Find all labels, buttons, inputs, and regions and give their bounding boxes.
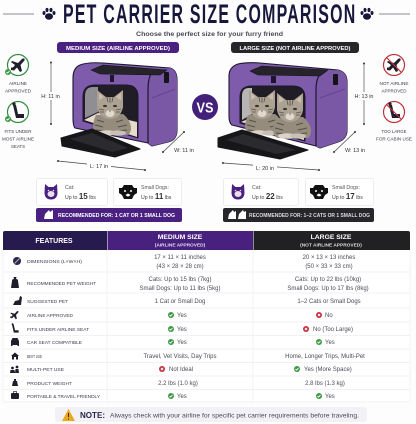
row: dimensions: (50 × 33 × 33 cm)	[305, 264, 353, 270]
row: suggested pet: 1–2 Cats or Small Dogs	[297, 299, 361, 305]
icon: too large for cabin: TOO LARGE	[382, 129, 406, 135]
recommendation bar large	[223, 208, 374, 222]
width dimension large: W: 13 in	[345, 148, 365, 154]
row: suggested pet: 1 Cat or Small Dog	[155, 299, 205, 305]
row: dimensions: 17 × 11 × 11 inches	[154, 255, 206, 261]
row: dimensions: DIMENSIONS (L×W×H)	[27, 259, 82, 265]
icon: too large for cabin: FOR CABIN USE	[376, 136, 412, 142]
card: large cat weight	[224, 178, 298, 206]
width dimension medium	[162, 131, 194, 154]
table header: large size: (NOT AIRLINE APPROVED)	[300, 242, 362, 248]
row: recommended pet weight: Small Dogs: Up to 11 lbs (5kg)	[140, 286, 220, 292]
height dimension medium: H: 11 in	[41, 94, 60, 100]
row: fits under airline seat: Yes	[177, 327, 187, 333]
card: large dog weight	[306, 178, 374, 206]
length dimension large: L: 20 in	[256, 166, 274, 172]
icon: fits under seat: FITS UNDER	[4, 129, 32, 135]
table header: large size: LARGE SIZE	[311, 234, 352, 241]
table header: features: FEATURES	[35, 238, 73, 245]
row: best use: Home, Longer Trips, Multi-Pet	[285, 354, 365, 360]
row: multi-pet use	[10, 366, 352, 373]
length dimension large	[222, 162, 320, 172]
row: fits under airline seat: No (Too Large)	[313, 327, 353, 333]
row: car seat compatible: Yes	[325, 340, 335, 346]
recommendation bar medium	[36, 208, 182, 222]
comparison table	[3, 231, 410, 402]
row: car seat compatible: CAR SEAT COMPATIBLE	[27, 340, 82, 346]
note callout: NOTE:	[80, 411, 105, 420]
row: multi-pet use: Yes (More Space)	[304, 367, 352, 373]
width dimension medium: W: 11 in	[174, 148, 194, 154]
VS badge	[192, 94, 218, 120]
row: airline approved	[10, 311, 333, 319]
card: medium dog weight: Up to 11 lbs	[141, 192, 172, 201]
large carrier with two cats	[218, 63, 347, 159]
row: suggested pet: SUGGESTED PET	[27, 299, 68, 305]
card: medium dog weight: Small Dogs:	[141, 185, 169, 191]
card: large dog weight: Small Dogs:	[332, 185, 360, 191]
row: best use	[11, 352, 365, 360]
note callout: Always check with your airline for specific pet carrier requirements before traveling.	[110, 414, 359, 420]
row: recommended pet weight: Small Dogs: Up to 17 lbs (8kg)	[287, 286, 369, 292]
row: suggested pet	[13, 296, 361, 305]
table header: large size	[254, 231, 410, 250]
row: car seat compatible: Yes	[177, 340, 187, 346]
row: dimensions	[13, 255, 355, 270]
large size pill: LARGE SIZE (NOT AIRLINE APPROVED)	[240, 46, 351, 52]
row: recommended pet weight: Cats: Up to 15 lbs (7kg)	[148, 277, 212, 283]
VS badge: VS	[196, 100, 214, 116]
row: fits under airline seat: FITS UNDER AIRLINE SEAT	[27, 327, 89, 333]
card: large cat weight: Up to 22 lbs	[252, 192, 283, 201]
row: recommended pet weight: RECOMMENDED PET WEIGHT	[27, 281, 96, 287]
icon: not airline approved	[380, 54, 408, 94]
icon: airline approved	[5, 54, 32, 94]
medium size pill	[57, 42, 179, 53]
icon: not airline approved: APPROVED	[382, 88, 407, 94]
icon: fits under seat	[2, 102, 34, 150]
table header: medium size: (AIRLINE APPROVED)	[155, 242, 206, 248]
subtitle: Choose the perfect size for your furry friend	[136, 31, 283, 38]
row: product weight: 2.2 lbs (1.0 kg)	[158, 381, 198, 387]
recommendation bar medium: RECOMMENDED FOR: 1 CAT OR 1 SMALL DOG	[58, 213, 175, 219]
table header: medium size: MEDIUM SIZE	[158, 234, 203, 241]
large size pill	[231, 42, 359, 53]
card: medium dog weight	[114, 178, 182, 206]
row: multi-pet use: MULTI-PET USE	[27, 367, 64, 373]
card: medium cat weight	[36, 178, 108, 206]
card: medium cat weight: Up to 15 lbs	[65, 192, 96, 201]
recommendation bar large: RECOMMENDED FOR: 1–2 CATS OR 1 SMALL DOG	[249, 213, 370, 219]
icon: fits under seat: SEATS	[11, 144, 25, 150]
row: product weight: PRODUCT WEIGHT	[27, 381, 72, 387]
height dimension medium	[40, 62, 62, 125]
length dimension medium: L: 17 in	[90, 164, 108, 170]
note callout	[55, 407, 367, 422]
row: recommended pet weight	[11, 277, 369, 292]
row: airline approved: AIRLINE APPROVED	[27, 313, 74, 319]
card: medium cat weight: Cat:	[65, 185, 75, 191]
row: portable and travel friendly: Yes	[177, 394, 187, 400]
row: portable and travel friendly: Yes	[325, 394, 335, 400]
table header: medium size	[108, 231, 253, 250]
card: large cat weight: Cat:	[252, 185, 262, 191]
length dimension medium	[57, 160, 146, 171]
medium carrier with cat	[61, 63, 177, 157]
icon: airline approved: APPROVED	[5, 88, 32, 94]
row: product weight: 2.8 lbs (1.3 kg)	[305, 381, 345, 387]
row: recommended pet weight: Cats: Up to 22 lbs (10kg)	[295, 277, 361, 283]
height dimension large: H: 13 in	[355, 94, 373, 100]
row: best use: BEST USE	[27, 354, 42, 360]
row: dimensions: 20 × 13 × 13 inches	[303, 255, 355, 261]
table header: features	[3, 231, 107, 250]
row: product weight	[12, 379, 345, 387]
card: large dog weight: Up to 17 lbs	[332, 192, 363, 201]
icon: fits under seat: MOST AIRLINE	[2, 136, 34, 142]
row: airline approved: No	[325, 313, 333, 319]
row: best use: Travel, Vet Visits, Day Trips	[143, 354, 217, 360]
row: portable and travel friendly: PORTABLE & TRAVEL FRIENDLY	[27, 394, 101, 400]
icon: too large for cabin	[376, 102, 412, 142]
width dimension large	[333, 131, 365, 154]
row: portable and travel friendly	[11, 392, 335, 400]
row: dimensions: (43 × 28 × 28 cm)	[156, 264, 204, 270]
icon: not airline approved: NOT AIRLINE	[380, 81, 408, 87]
row: airline approved: Yes	[177, 313, 187, 319]
medium size pill: MEDIUM SIZE (AIRLINE APPROVED)	[66, 46, 170, 52]
row: fits under airline seat	[12, 323, 353, 333]
row: car seat compatible	[11, 338, 335, 346]
icon: airline approved: AIRLINE	[9, 81, 27, 87]
row: multi-pet use: Not Ideal	[169, 367, 193, 373]
height dimension large	[353, 62, 375, 125]
